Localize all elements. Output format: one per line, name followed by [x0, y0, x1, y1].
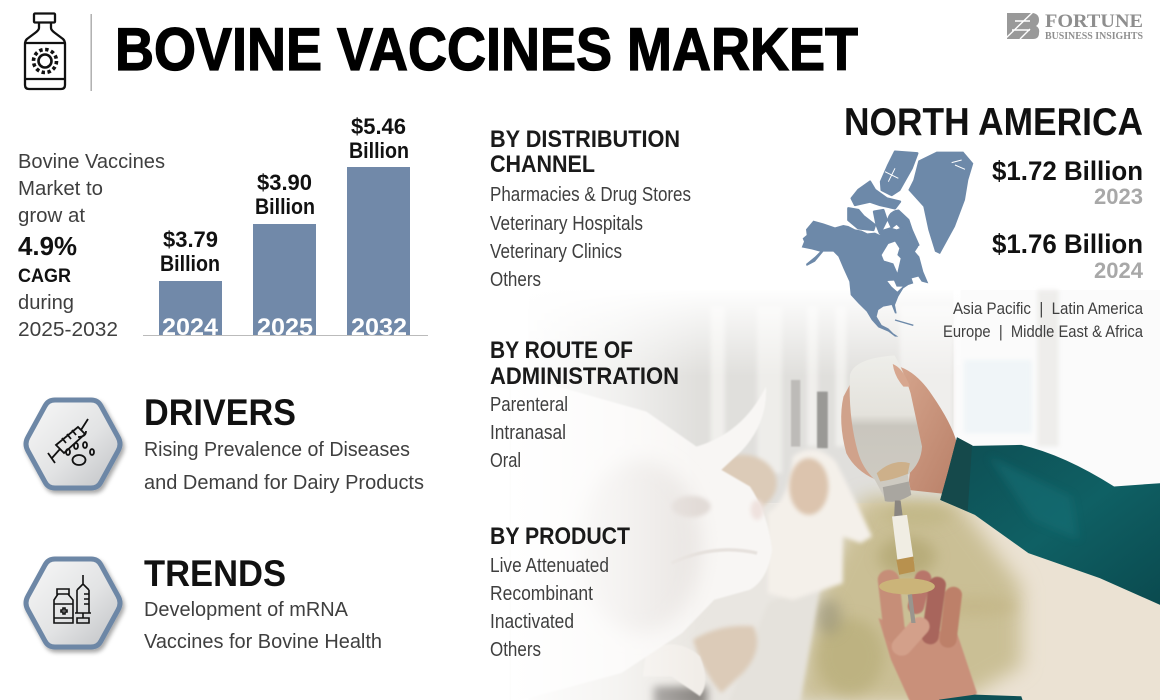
- stat: 2024 value: 2024: [1094, 258, 1144, 283]
- icon: trends hexagon with bottle and syringe: [26, 559, 120, 647]
- trends text: TRENDS: [144, 553, 286, 594]
- map: North America: [802, 152, 973, 337]
- segment: by distribution channel: [490, 126, 691, 291]
- syringe: [892, 501, 915, 575]
- CAGR text block: grow at: [18, 205, 85, 227]
- segment: by distribution channel: Veterinary Clinics: [490, 241, 622, 263]
- stat: 2023 value: 2023: [1094, 184, 1143, 209]
- segment: by route of administration: ADMINISTRATION: [490, 363, 679, 390]
- bar chart: market size: 2024: [162, 314, 218, 341]
- trends text: Vaccines for Bovine Health: [144, 631, 382, 653]
- stat: 2023 value: $1.72 Billion: [992, 156, 1143, 186]
- segment: by route of administration: Intranasal: [490, 422, 566, 444]
- drivers text: and Demand for Dairy Products: [144, 472, 424, 494]
- segment: by distribution channel: CHANNEL: [490, 151, 595, 178]
- segment: by product: [490, 523, 630, 661]
- sleeve: [939, 437, 1160, 700]
- other regions list: Europe | Middle East & Africa: [943, 323, 1144, 341]
- logo: Fortune Business Insights: [1005, 11, 1143, 42]
- segment: by distribution channel: Veterinary Hospitals: [490, 213, 643, 235]
- CAGR text block: CAGR: [18, 266, 71, 287]
- segment: by distribution channel: Pharmacies & Drug Stores: [490, 184, 691, 206]
- bar chart: market size: $3.79: [163, 227, 218, 252]
- segment: by route of administration: BY ROUTE OF: [490, 337, 633, 364]
- segment: by product: Live Attenuated: [490, 555, 609, 577]
- stat: 2024 value: $1.76 Billion: [992, 229, 1143, 259]
- bar chart: market size: 2025: [257, 314, 313, 341]
- icon: drivers hexagon with syringe and paw: [26, 400, 120, 488]
- icon: vaccine bottle: [25, 14, 65, 89]
- segment: by product: BY PRODUCT: [490, 523, 630, 550]
- bar chart: market size: 2032: [351, 314, 407, 341]
- CAGR text block: [18, 151, 165, 341]
- bar chart: market size: $5.46: [351, 114, 406, 139]
- syringe flange: [879, 578, 935, 623]
- bar chart: market size: Billion: [160, 251, 220, 276]
- segment: by product: Inactivated: [490, 611, 574, 633]
- segment: by route of administration: Oral: [490, 450, 521, 472]
- drivers text: [144, 392, 424, 494]
- segment: by distribution channel: Others: [490, 269, 541, 291]
- segment: by route of administration: [490, 337, 679, 472]
- CAGR text block: during: [18, 292, 74, 314]
- lower hand: [878, 578, 977, 700]
- drivers text: DRIVERS: [144, 392, 296, 433]
- vaccine bottle: [850, 355, 922, 502]
- logo: Fortune Business Insights: FORTUNE: [1045, 11, 1143, 32]
- title: BOVINE VACCINES MARKET: [115, 16, 858, 83]
- drivers text: Rising Prevalence of Diseases: [144, 439, 410, 461]
- trends text: [144, 553, 382, 653]
- header divider: [90, 14, 92, 91]
- other regions list: [943, 300, 1144, 341]
- segment: by route of administration: Parenteral: [490, 394, 568, 416]
- CAGR text block: Bovine Vaccines: [18, 151, 165, 173]
- bar chart: market size: Billion: [349, 138, 409, 163]
- segment: by product: Recombinant: [490, 583, 593, 605]
- stat: 2024 value: [992, 229, 1144, 283]
- CAGR text block: 4.9%: [18, 231, 77, 261]
- upper hand: [841, 365, 957, 494]
- CAGR text block: Market to: [18, 178, 103, 200]
- logo: Fortune Business Insights: BUSINESS INSIGHTS: [1045, 31, 1143, 42]
- bar chart: market size: Billion: [255, 194, 315, 219]
- CAGR text block: 2025-2032: [18, 319, 118, 341]
- trends text: Development of mRNA: [144, 599, 349, 621]
- bar chart: market size: $3.90: [257, 170, 312, 195]
- segment: by product: Others: [490, 639, 541, 661]
- photo: farm worker vaccinating cattle: [511, 287, 1160, 700]
- other regions list: Asia Pacific | Latin America: [953, 300, 1144, 318]
- bar chart: market size: [143, 114, 428, 341]
- segment: by distribution channel: BY DISTRIBUTION: [490, 126, 680, 153]
- stat: 2023 value: [992, 156, 1143, 209]
